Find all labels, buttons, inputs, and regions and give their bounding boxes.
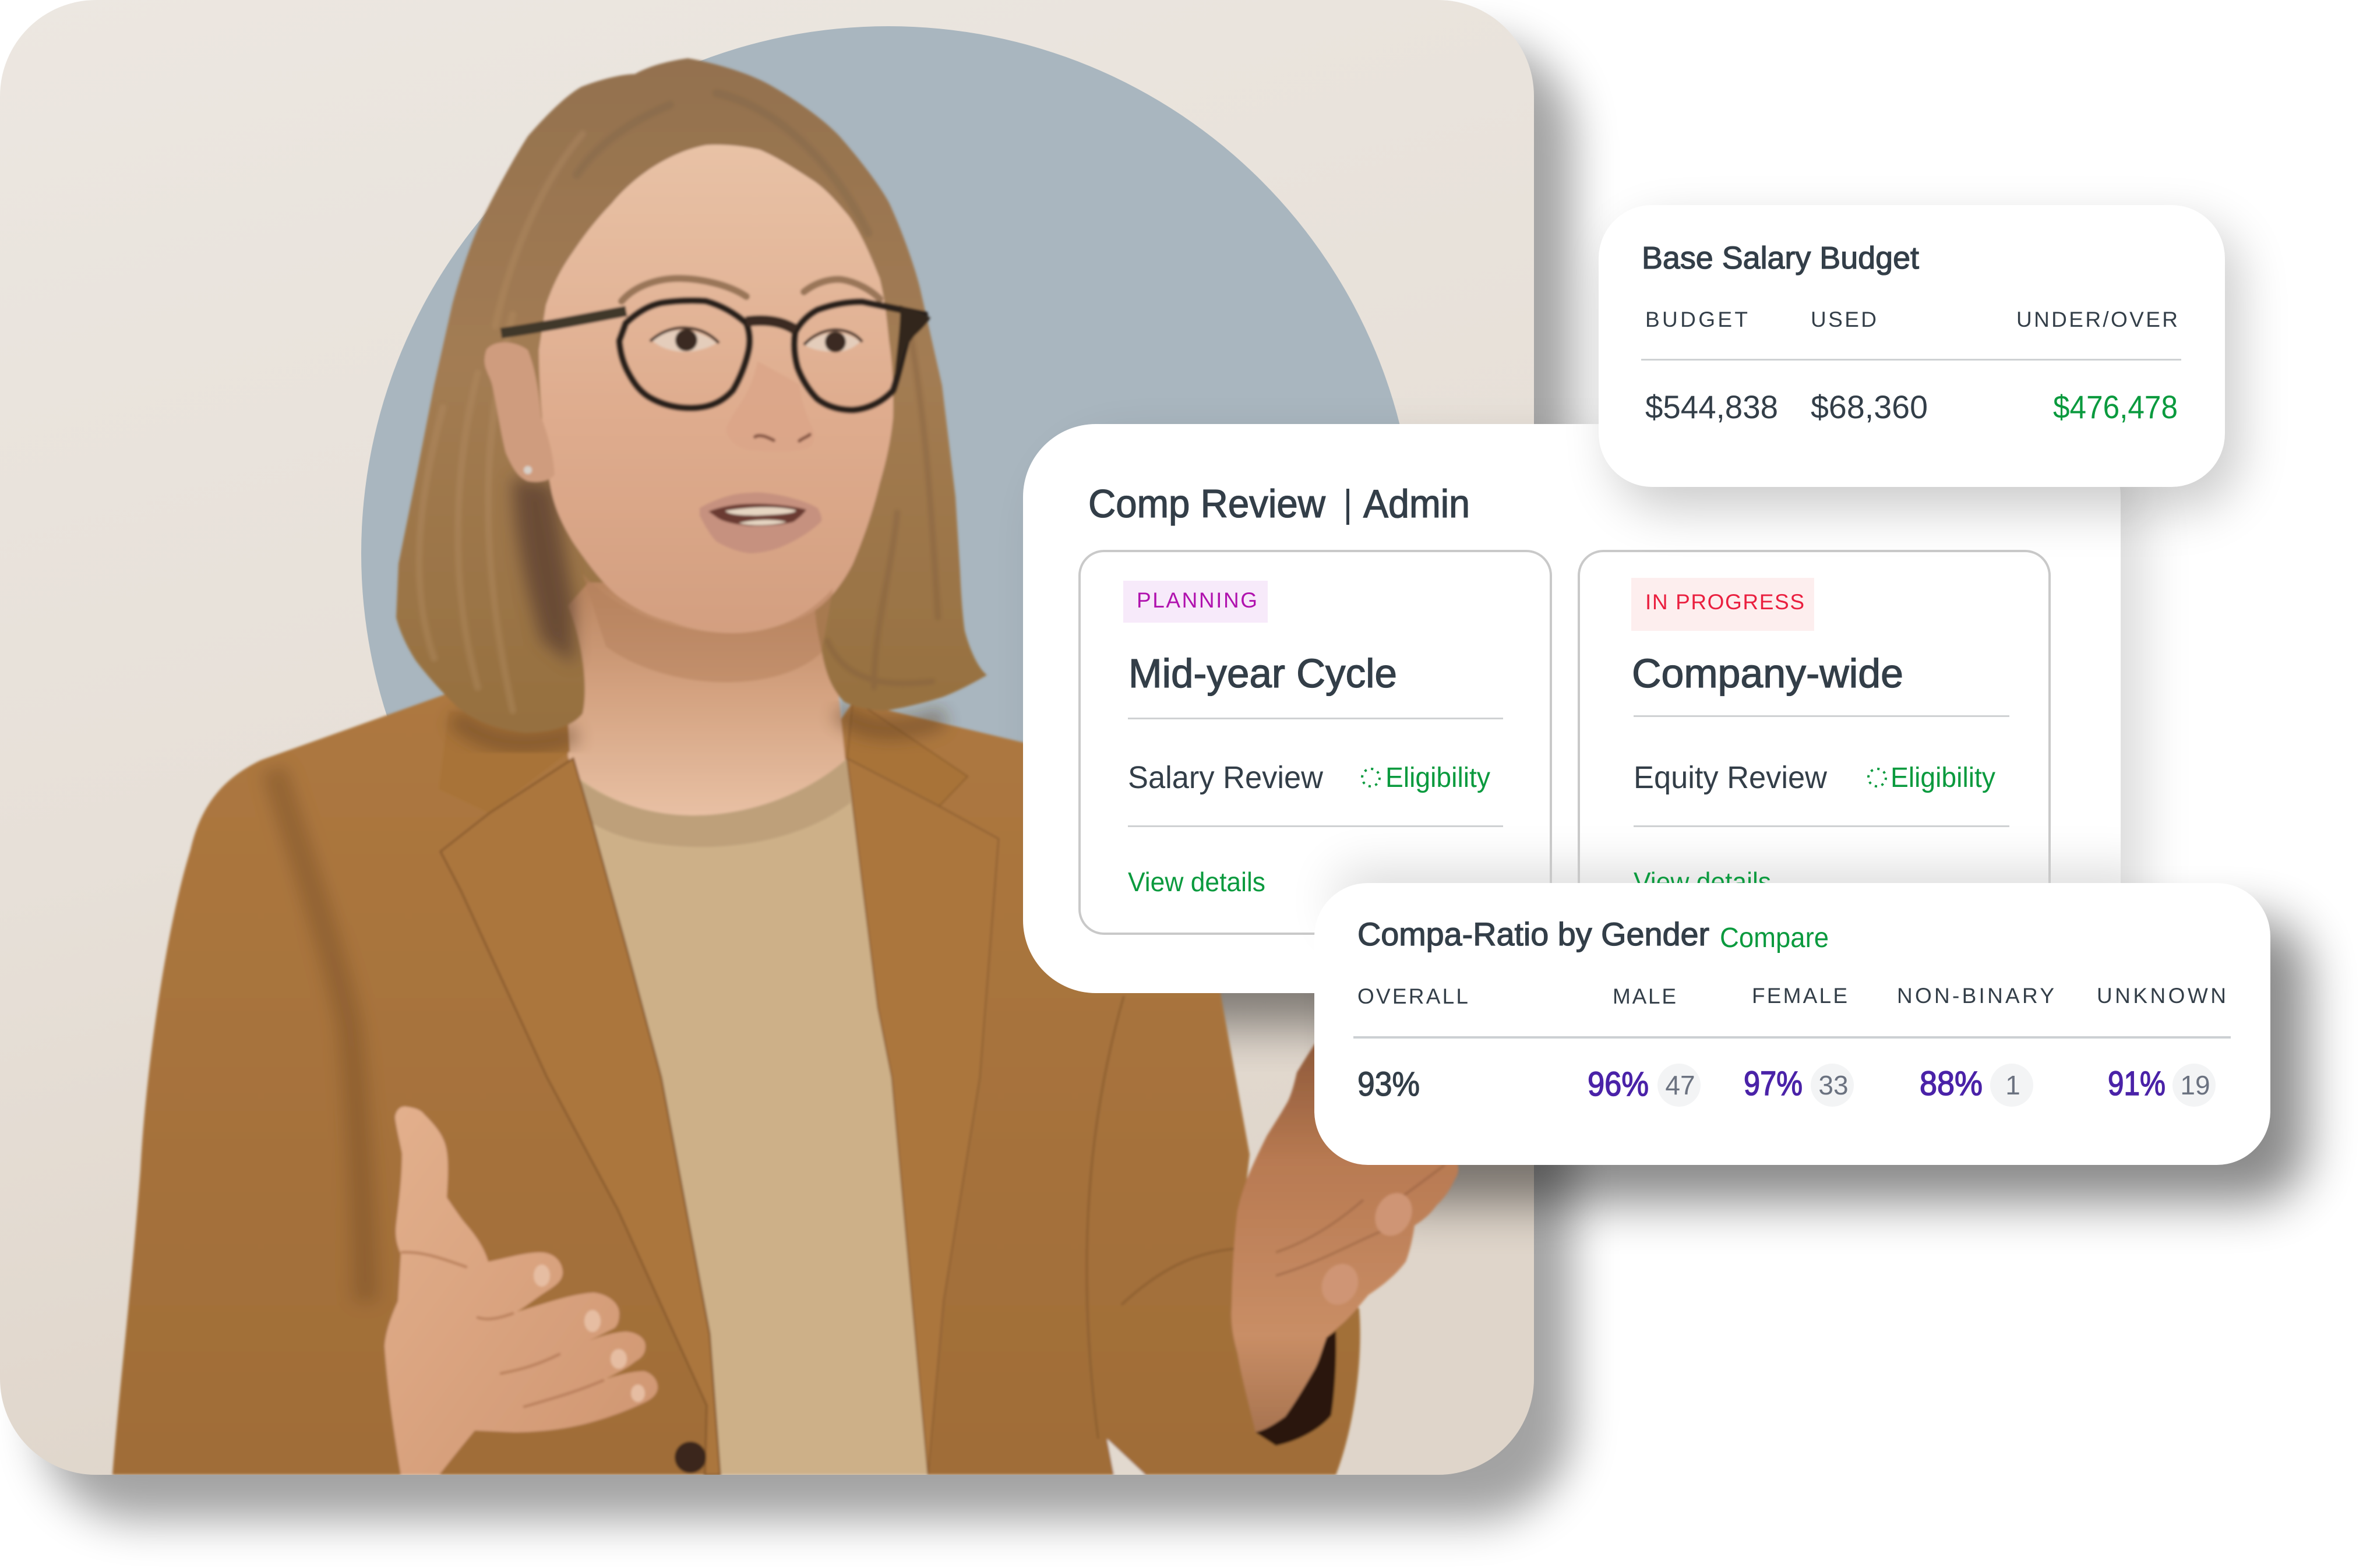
sub-card: Company-wide: [1579, 551, 2050, 934]
hair shadow on collar: [454, 711, 944, 743]
non-binary value: 88%: [1920, 1065, 1983, 1103]
left hand nails: [534, 1265, 645, 1402]
glasses right hinge: [894, 305, 930, 379]
column labels: FEMALE: [1752, 984, 1847, 1008]
salary review row: Salary Review: [1128, 760, 1324, 795]
icon: spinner: [1868, 769, 1886, 786]
salary review row: Eligibility: [1385, 762, 1490, 793]
column labels: MALE: [1613, 984, 1676, 1008]
sweater collar: [580, 758, 851, 847]
heading: [1088, 482, 1470, 526]
values: $544,838: [1645, 389, 1778, 425]
female value: 33: [1818, 1070, 1849, 1100]
photo: woman presenting: [112, 58, 1458, 1475]
link: view details: View details: [1634, 867, 1771, 897]
inner sleeve: [1255, 1331, 1336, 1446]
compa-ratio card shadow: [1352, 917, 2307, 1203]
left hand: [385, 1107, 658, 1475]
overall value: 93%: [1357, 1065, 1420, 1103]
panel: Compa-Ratio by Gender: [1314, 883, 2270, 1165]
column labels: USED: [1811, 308, 1877, 331]
sleeve fold shadow: [274, 769, 366, 1302]
female value: 97%: [1744, 1065, 1803, 1103]
column labels: UNDER/OVER: [2016, 308, 2178, 331]
neck: [568, 582, 845, 815]
column labels: BUDGET: [1645, 308, 1748, 331]
glasses: [501, 301, 925, 410]
panel: Base Salary Budget: [1599, 205, 2225, 487]
right hand lines: [1276, 1165, 1445, 1276]
hem gap: [1107, 1439, 1145, 1475]
mouth: [700, 492, 821, 553]
jacket: [112, 693, 1360, 1475]
comp review card shadow: [1043, 443, 2144, 1025]
icon: spinner: [1362, 769, 1380, 786]
photo card shadow: [41, 41, 1573, 1520]
button: [675, 1442, 706, 1473]
right hand: [1231, 1044, 1458, 1432]
cycle title: Mid-year Cycle: [1128, 651, 1397, 696]
unknown value: 19: [2180, 1070, 2210, 1100]
unknown value: 91%: [2108, 1065, 2166, 1103]
eyebrows: [622, 278, 880, 301]
upper collar left: [439, 711, 570, 813]
equity review row: Eligibility: [1891, 762, 1995, 793]
badge: planning: PLANNING: [1137, 588, 1257, 612]
hair: [396, 58, 987, 733]
chin shade: [583, 574, 833, 682]
panel: Comp Review admin: [1023, 424, 2156, 993]
column labels: [1645, 308, 2178, 331]
upper collar right: [847, 699, 968, 806]
non-binary value: [1920, 1064, 2033, 1107]
badge: in progress: IN PROGRESS: [1645, 590, 1804, 614]
hair under-shadow: [513, 478, 574, 664]
non-binary value: 1: [2005, 1070, 2020, 1100]
male value: [1588, 1064, 1701, 1107]
ear: [485, 342, 555, 482]
female value: [1744, 1064, 1854, 1107]
cycle title: Company-wide: [1632, 651, 1903, 696]
values: $68,360: [1811, 389, 1928, 425]
nose: [726, 361, 814, 451]
column labels: NON-BINARY: [1897, 984, 2054, 1008]
right hand fingertips: [1315, 1187, 1419, 1311]
photo background: [0, 0, 1534, 1475]
equity review row: Equity Review: [1634, 760, 1828, 795]
unknown value: [2108, 1064, 2216, 1107]
salary review row: [1128, 760, 1490, 795]
eyes: [653, 330, 860, 352]
column labels: UNKNOWN: [2097, 984, 2226, 1008]
face: [539, 144, 893, 633]
badge: planning: [1123, 581, 1268, 623]
right lapel: [847, 758, 999, 1475]
soft shade above compa card: [1340, 874, 2156, 926]
link: view details: View details: [1128, 867, 1265, 897]
male value: 96%: [1588, 1065, 1649, 1103]
sleeve seam right: [1087, 996, 1235, 1439]
equity review row: [1634, 760, 1995, 795]
left hand finger lines: [402, 1252, 603, 1407]
heading: Base Salary Budget: [1642, 241, 1919, 276]
sub-card: Mid-year Cycle: [1080, 551, 1551, 934]
values: [1645, 389, 2178, 425]
column labels: OVERALL: [1357, 984, 1468, 1008]
left lapel: [440, 758, 720, 1475]
hair strands: [419, 93, 938, 711]
person illustration: [112, 58, 1458, 1475]
sweater: [580, 758, 928, 1475]
column labels: [1357, 984, 2226, 1008]
heading: Compa-Ratio by Gender: [1357, 916, 1709, 952]
heading: Compare: [1720, 923, 1829, 953]
values: $476,478: [2053, 389, 2178, 425]
heading: Comp Review: [1088, 482, 1326, 526]
budget card shadow: [1614, 224, 2240, 510]
male value: 47: [1665, 1070, 1695, 1100]
heading: Admin: [1363, 482, 1470, 526]
earring: [524, 466, 532, 474]
blue circle: [361, 26, 1399, 744]
badge: in progress: [1631, 578, 1814, 631]
